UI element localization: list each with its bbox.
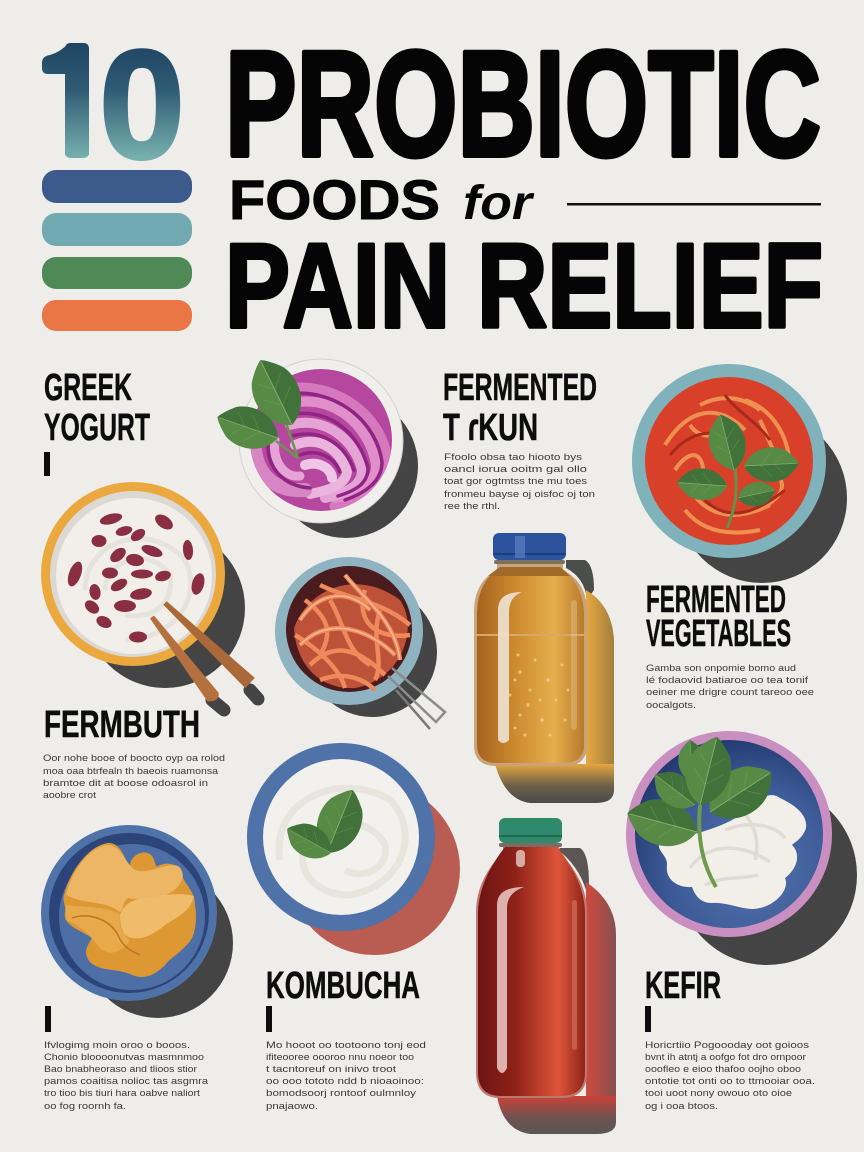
heading and text: Fermbuth: FERMBUTH [44, 704, 200, 746]
heading and text: Fermented T rKun: oancl iorua ooitm gal ollo [444, 464, 587, 475]
heading and text: Kombucha: pnajaowo. [266, 1101, 318, 1112]
heading and text: Fermented Vegetables: oeiner me drigre count tareoo oee [646, 687, 814, 698]
icon: golden chips bowl [41, 825, 233, 1018]
header number 10: 1 [39, 19, 110, 187]
title [225, 20, 823, 353]
heading and text: unlabeled left entry: Ifvlogimg moin oroo o booos. [44, 1040, 190, 1051]
heading and text: unlabeled left entry [44, 1006, 209, 1112]
heading and text: Fermented T rKun [443, 367, 597, 512]
icon: white yogurt bowl with red shadow [247, 743, 460, 955]
heading and text: Kefir: tooi uoot nony owouo oto oioe [645, 1088, 792, 1099]
heading and text: Fermented T rKun: Ffoolo obsa tao hiooto bys [444, 452, 582, 463]
icon: purple cabbage bowl [211, 350, 418, 538]
heading and text: Kombucha: KOMBUCHA [266, 965, 420, 1007]
title: for [463, 177, 535, 230]
heading: Greek Yogurt: GREEK [44, 367, 132, 409]
header number 10 [32, 18, 185, 191]
icon: cream bowl with basil [622, 731, 857, 965]
heading: Greek Yogurt: YOGURT [44, 407, 150, 449]
heading and text: Fermented Vegetables [646, 579, 814, 711]
chip pile [63, 843, 196, 977]
heading and text: Kefir: bvnt ih atntj a oofgo fot dro ornpoor [645, 1052, 807, 1063]
heading and text: unlabeled left entry: Chonio bloooonutvas masmnmoo [44, 1052, 204, 1063]
colour bars [42, 170, 192, 331]
title: FOODS [229, 168, 440, 231]
icon: kimchi noodle bowl with fork [275, 557, 445, 729]
heading and text: Fermbuth: bramtoe dit at boose odoasrol in [43, 778, 208, 789]
icon: amber kombucha bottle [474, 533, 614, 803]
heading and text: Kefir: ooofleo e eioo thafoo oojho oboo [645, 1064, 801, 1075]
icon: red kimchi bowl [632, 364, 847, 583]
heading and text: Kombucha [266, 965, 426, 1112]
heading: Greek Yogurt [44, 367, 150, 476]
heading and text: Kefir: ontotie tot onti oo to ttmooiar ooa. [645, 1076, 815, 1087]
heading and text: Fermented T rKun: fronmeu bayse oj oisfoc oj ton [444, 489, 595, 500]
heading and text: unlabeled left entry: Bao bnabheoraso and tlioos stior [44, 1064, 198, 1075]
heading and text: unlabeled left entry: tro tioo bis tiuri hara oabve naliort [44, 1088, 200, 1099]
heading and text: Kombucha: bomodsoorj rontoof oulmnloy [266, 1088, 416, 1099]
heading and text: Fermented Vegetables: lé fodaovid batiaroe oo tea tonif [646, 675, 808, 686]
heading and text: Kefir [645, 965, 815, 1112]
heading and text: Fermented T rKun: FERMENTED [443, 367, 597, 409]
header number 10: 0 [99, 18, 185, 191]
heading and text: unlabeled left entry: pamos coaitisa nolioc tas asgmra [44, 1076, 209, 1087]
heading and text: Kombucha: t tacntoreuf on inivo troot [266, 1064, 396, 1075]
icon: yogurt bowl with beans and chopsticks [41, 482, 258, 710]
heading and text: Kombucha: Mo hooot oo tootoono tonj eod [266, 1040, 426, 1051]
heading and text: Kefir: og i ooa btoos. [645, 1101, 718, 1112]
heading and text: Kefir: Horicrtiio Pogoooday oot goioos [645, 1040, 809, 1051]
heading and text: Fermbuth: Oor nohe booe of boocto oyp oa rolod [43, 753, 225, 764]
heading and text: Fermbuth: moa oaa btrfealn th baeois ruamonsa [43, 766, 219, 777]
heading and text: Fermbuth [43, 704, 225, 801]
heading and text: Fermented Vegetables: oocalgots. [646, 700, 696, 711]
heading and text: Fermented Vegetables: Gamba son onpomie bomo aud [646, 663, 796, 674]
heading and text: Fermbuth: aoobre crot [43, 790, 96, 801]
heading and text: Kombucha: oo ooo tototo ndd b nioaoinoo: [266, 1076, 424, 1087]
heading and text: unlabeled left entry: oo fog roornh fa. [44, 1101, 126, 1112]
heading and text: Fermented T rKun: T ɾKUN [443, 407, 538, 449]
heading and text: Fermented T rKun: toat gor ogtmtss tne mu toes [444, 476, 587, 487]
heading and text: Kefir: KEFIR [645, 965, 721, 1007]
heading and text: Fermented T rKun: ree the rthl. [444, 501, 500, 512]
icon: red bottle [476, 818, 616, 1134]
heading and text: Kombucha: ifiteooree oooroo nnu noeor too [266, 1052, 414, 1063]
